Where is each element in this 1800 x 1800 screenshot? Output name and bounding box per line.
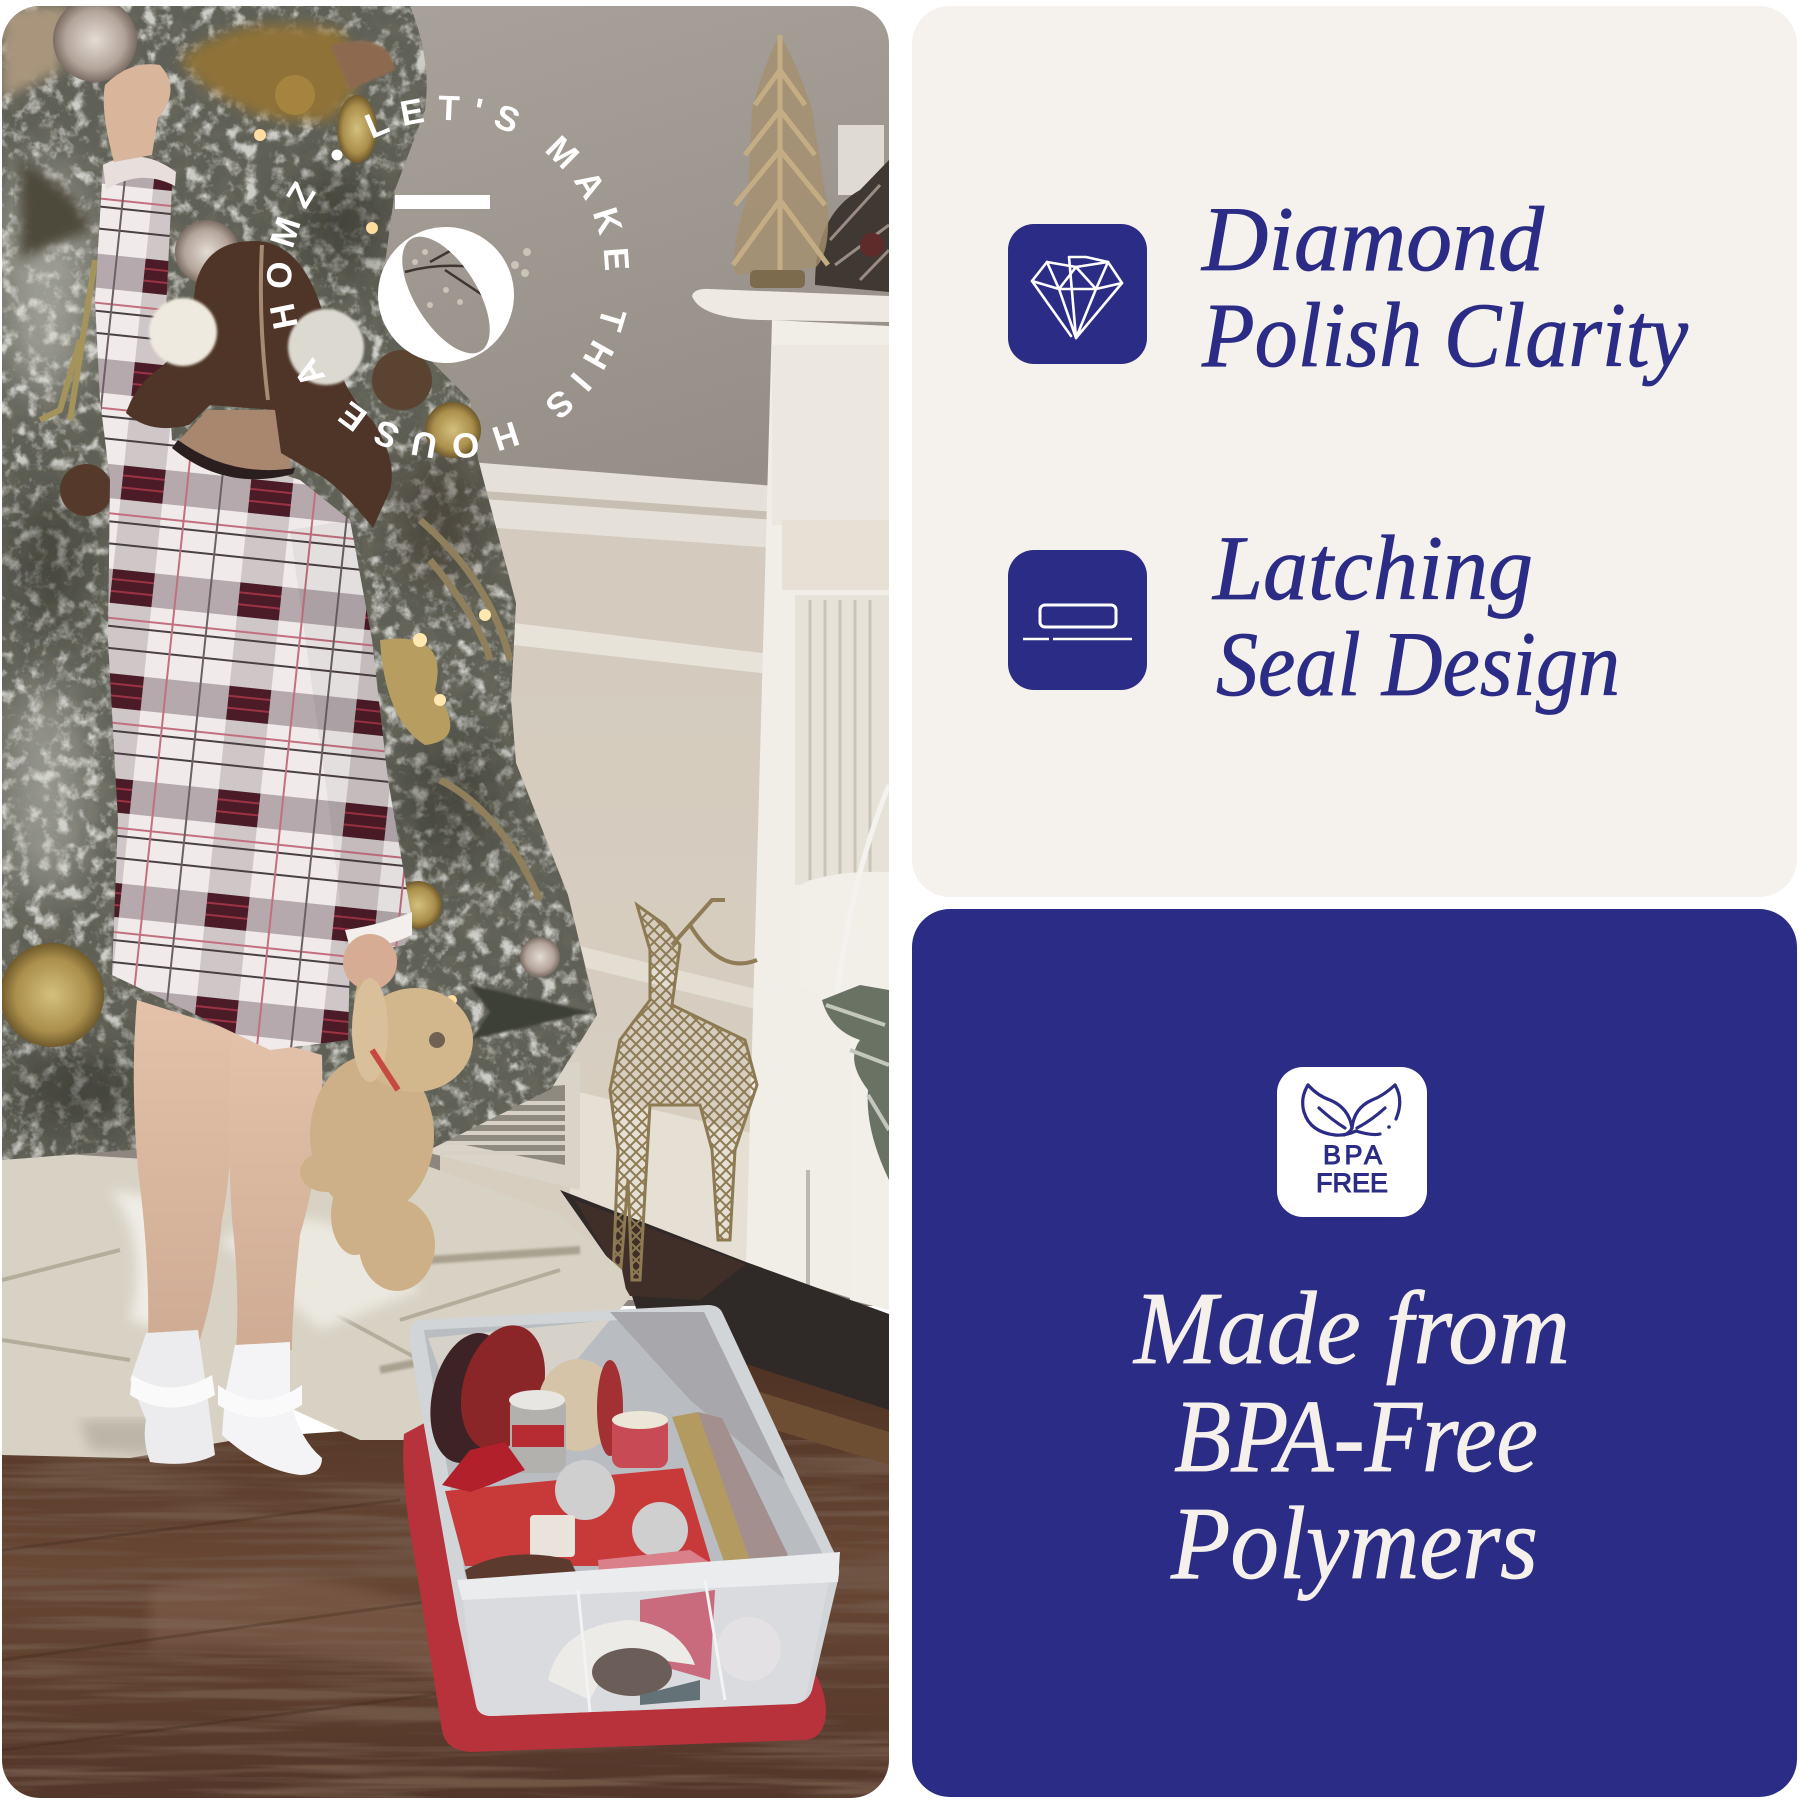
photo: girl's dress	[95, 156, 412, 1050]
contents: red twine spool	[612, 1422, 668, 1468]
photo: wall and wainscot	[2, 6, 889, 1306]
photo: christmas tree	[0, 6, 602, 1166]
photo: greenery and candle on mantel	[815, 125, 889, 1180]
icon: diamond	[1008, 224, 1147, 364]
contents: gold wrapping roll	[672, 1412, 750, 1560]
contents: white bow	[717, 1617, 781, 1681]
logo: circular brand mark	[266, 96, 630, 458]
heading: latching seal design	[1211, 517, 1620, 715]
heading: latching seal design: Latching	[1211, 517, 1533, 619]
panel: BPA free	[912, 909, 1797, 1797]
photo: ornaments and pine cones	[0, 0, 560, 1047]
heading: made from BPA-free polymers: Made from	[1132, 1271, 1570, 1386]
photo: wire reindeer	[610, 900, 757, 1280]
photo: girl's hand	[104, 64, 171, 162]
heading: diamond polish clarity: Diamond	[1200, 188, 1545, 290]
contents: silver bows	[555, 1460, 688, 1558]
heading: made from BPA-free polymers: Polymers	[1170, 1486, 1538, 1601]
photo: branch with berries behind logo	[404, 248, 531, 308]
box latch marks	[578, 1580, 725, 1712]
contents: gift tag	[530, 1515, 575, 1557]
photo: hardwood floor	[2, 1190, 889, 1800]
icon: BPA free badge: BPA	[1323, 1140, 1382, 1170]
heading: diamond polish clarity: Polish Clarity	[1201, 284, 1688, 386]
photo: clear storage box	[410, 1305, 840, 1716]
photo: girl's legs and socks	[130, 1000, 322, 1475]
photo: plush bunny	[300, 975, 473, 1291]
heading: made from BPA-free polymers	[1132, 1271, 1570, 1601]
contents: cream ribbon spool	[540, 1359, 602, 1451]
logo: letter O	[352, 201, 540, 389]
contents: red bow	[442, 1442, 525, 1492]
contents: striped ribbon and brown bow	[465, 1550, 708, 1580]
photo: girl's hair	[126, 241, 392, 528]
photo: hair pompoms	[149, 298, 364, 385]
photo: floor vent	[425, 1062, 580, 1190]
heading: latching seal design: Seal Design	[1216, 613, 1620, 715]
contents: white fuzzy headband	[548, 1620, 695, 1700]
logo: separator dot	[332, 150, 342, 160]
icon: BPA free badge	[1277, 1067, 1427, 1217]
panel: lifestyle photo	[0, 0, 889, 1800]
contents: red wrapping paper	[445, 1468, 712, 1566]
logo: ring text: LET'S MAKE THIS HOUSE A HOMZ	[266, 96, 630, 458]
icon: BPA free badge: FREE	[1316, 1168, 1388, 1198]
photo: tree skirt	[2, 1150, 628, 1458]
heading: diamond polish clarity	[1200, 188, 1688, 386]
heading: made from BPA-free polymers: BPA-Free	[1174, 1379, 1538, 1494]
contents: plaid ribbon spool	[430, 1333, 489, 1463]
logo: bar	[395, 195, 490, 209]
box front wall	[476, 1703, 789, 1716]
panel: features	[912, 6, 1797, 897]
icon: latch seal	[1008, 550, 1147, 690]
photo: gold tinsel tree	[733, 35, 828, 288]
photo: fireplace mantel	[692, 289, 889, 1330]
contents: pink wrapping roll	[698, 1412, 788, 1572]
contents: silver ribbon spool	[510, 1395, 566, 1473]
contents: pink striped paper in front	[640, 1590, 715, 1680]
photo: girl's hand holding bunny	[343, 934, 397, 990]
photo: girl's neck and collar	[172, 410, 295, 479]
photo: red lid	[403, 1420, 826, 1752]
